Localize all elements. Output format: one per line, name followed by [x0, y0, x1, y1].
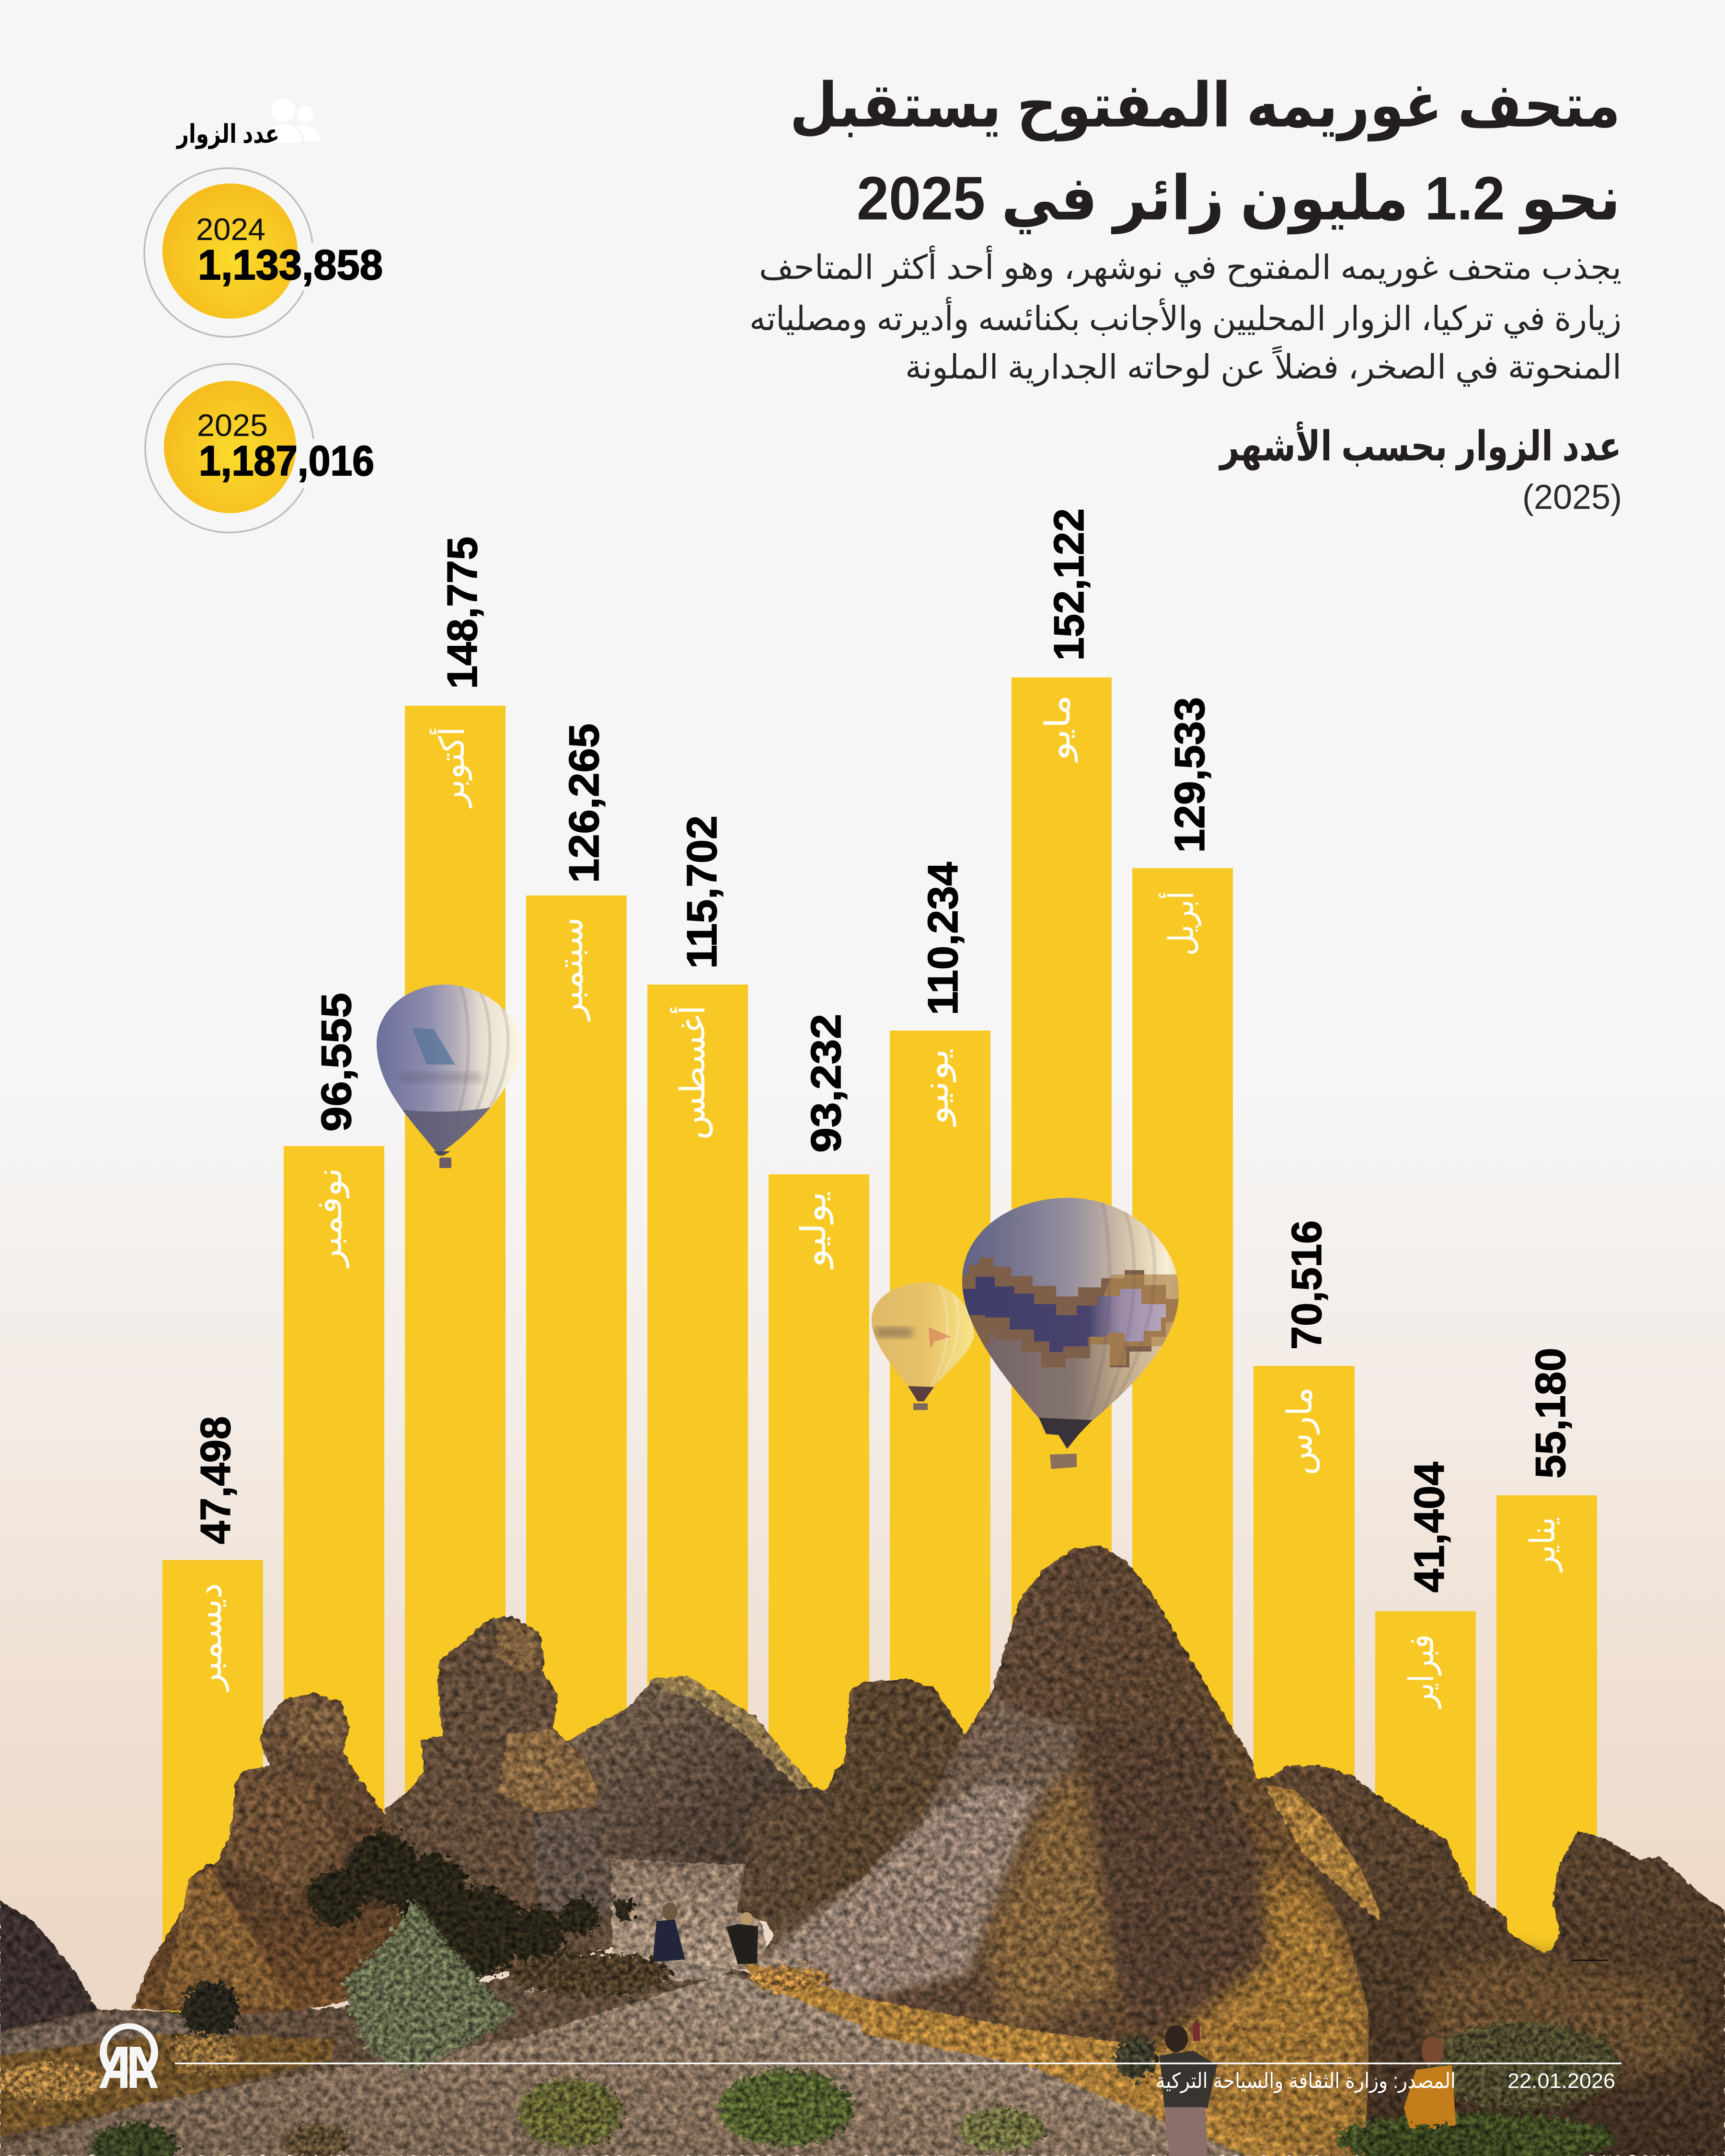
bar: September: 126,265 [560, 723, 608, 883]
upper gravel left [0, 2012, 240, 2055]
title [790, 71, 1621, 234]
grass highlights [0, 2063, 105, 2101]
bar: November [284, 993, 384, 1865]
sage shrub [345, 1897, 518, 2070]
bar: November: 96,555 [312, 993, 360, 1132]
bar: May: 152,122 [1045, 508, 1092, 661]
bar: October: أكتوبر [429, 727, 472, 808]
bar: October: 148,775 [438, 537, 486, 689]
photo: Cappadocia rock formations [0, 1545, 1725, 2156]
dry scrub [508, 1952, 671, 1995]
rock: far left [0, 1901, 101, 2046]
bar: March: مارس [1281, 1387, 1320, 1475]
bar: December: ديسمبر [190, 1583, 230, 1692]
foreground shrubs [91, 2122, 177, 2156]
bar: May: مايو [1039, 695, 1078, 763]
person: woman in orange [1404, 2036, 1457, 2142]
ground base [0, 1957, 1270, 2156]
rocks group [0, 1545, 1725, 2156]
stat: 2024 visitors: 2024 [196, 212, 265, 247]
intro paragraph: يجذب متحف غوريمه المفتوح في نوشهر، وهو أحد أكثر المتاحف [759, 245, 1622, 287]
stat: 2025 visitors: 2025 [197, 408, 268, 443]
footer rule [175, 2063, 1622, 2064]
bar: August: 115,702 [678, 815, 725, 969]
vegetation [0, 1833, 1620, 2156]
rock: right ridge [1246, 1766, 1725, 2156]
lower envelope panel [958, 1318, 1188, 1437]
dark boulder beside hollow [737, 1791, 830, 1926]
bar: April: 129,533 [1166, 697, 1213, 853]
bar: August [647, 815, 748, 1799]
visitor totals panel [144, 99, 383, 532]
pale left face [759, 1782, 1040, 2003]
bar: October [405, 537, 506, 1856]
bar: November: نوفمبر [310, 1168, 350, 1268]
source: المصدر: وزارة الثقافة والسياحة التركية [1156, 2069, 1456, 2093]
bar: July: 93,232 [802, 1014, 850, 1153]
stat: 2025 visitors [145, 364, 374, 532]
logo: AA [99, 2023, 158, 2088]
bar: September: سبتمبر [552, 917, 591, 1021]
person: seated woman [653, 1903, 685, 1962]
bar: April [1132, 697, 1233, 1826]
person: man [726, 1912, 758, 1964]
intro paragraph: المنحوتة في الصخر، فضلاً عن لوحاته الجدارية الملونة [905, 346, 1622, 387]
golden lit face left [987, 1768, 1121, 2031]
golden lit face right [1150, 1869, 1370, 2156]
bar: April: أبريل [1159, 891, 1202, 956]
mid-tone upper left face [923, 1696, 1078, 1869]
bar: December [162, 1416, 263, 2039]
visitors label: عدد الزوار [176, 120, 279, 149]
people [653, 1903, 1457, 2156]
bar: May [1012, 508, 1112, 1827]
dark bush left [182, 1981, 240, 2039]
chart heading [1219, 422, 1622, 516]
footer [99, 2023, 1622, 2093]
rock: small hoodoo centre [751, 1678, 973, 1940]
date: 22.01.2026 [1507, 2069, 1615, 2093]
bar: February [1375, 1462, 1476, 1947]
bar: September [526, 723, 627, 1806]
rock: dry grass ledge [1265, 1785, 1380, 1921]
chart heading: عدد الزوار بحسب الأشهر [1219, 422, 1622, 470]
title: متحف غوريمه المفتوح يستقبل [790, 71, 1621, 141]
stat: 2025 visitors: 1,187,016 [199, 437, 374, 484]
zigzag navy band [961, 1277, 1166, 1352]
rock: tall hoodoo [385, 1617, 623, 1988]
balloon: white and blue [377, 985, 522, 1168]
grass left [0, 2034, 335, 2137]
bar: June: 110,234 [919, 862, 966, 1015]
rock: left hoodoo [132, 1693, 417, 2017]
person: woman with phone [1160, 2023, 1217, 2156]
zigzag brown band [958, 1258, 1184, 1367]
rock: big fairy chimney [759, 1545, 1368, 2156]
bar: January: 55,180 [1527, 1348, 1574, 1479]
bar: June: يونيو [917, 1048, 956, 1127]
bar: January: يناير [1524, 1517, 1563, 1572]
bar: February: 41,404 [1405, 1462, 1453, 1593]
bar: March [1254, 1220, 1355, 1893]
chart heading: (2025) [1522, 478, 1622, 516]
bar: July: يوليو [794, 1191, 834, 1269]
bar: January [1496, 1348, 1597, 1960]
bar: June [890, 862, 990, 1893]
bar: March: 70,516 [1283, 1220, 1330, 1350]
title: نحو 1.2 مليون زائر في 2025 [857, 164, 1621, 234]
foreground shrub over woman [1356, 2125, 1519, 2156]
bar: February: فبراير [1403, 1634, 1442, 1709]
stat: 2024 visitors: 1,133,858 [198, 241, 383, 288]
intro paragraph [749, 245, 1622, 387]
grass right [740, 1960, 1302, 2156]
bar chart: monthly visitors [162, 508, 1597, 2039]
gravel path [0, 1974, 1248, 2156]
ground layers [0, 1957, 1302, 2156]
stat: 2024 visitors [144, 168, 383, 337]
dark tree [307, 1833, 633, 1979]
dark centre [1083, 1725, 1270, 2046]
bar: August: أغسطس [670, 1005, 713, 1140]
small dark tick [1571, 1960, 1608, 1961]
intro paragraph: زيارة في تركيا، الزوار المحليين والأجانب بكنائسه وأديرته ومصلياته [749, 297, 1622, 339]
rock: rounded middle [566, 1676, 834, 1916]
sand hollow [610, 1859, 771, 1969]
icon: visitors [266, 99, 321, 143]
bar: July [769, 1014, 869, 1893]
bar: December: 47,498 [192, 1416, 239, 1544]
balloon: large striped [958, 1198, 1188, 1469]
balloon: yellow [872, 1283, 974, 1410]
